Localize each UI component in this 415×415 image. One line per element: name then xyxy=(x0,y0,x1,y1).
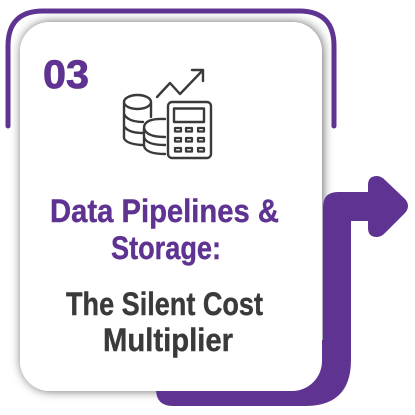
panel: card face xyxy=(20,22,322,391)
outline: purple top bracket xyxy=(8,11,334,126)
heading: purple title: Storage: xyxy=(111,230,221,266)
arrow: purple connector xyxy=(156,176,408,406)
subheading: dark text: The Silent Cost xyxy=(66,286,263,322)
subheading: dark text: Multiplier xyxy=(103,322,233,358)
icon: calculator display xyxy=(174,108,204,122)
step number: 03 xyxy=(43,53,89,97)
subheading: dark text xyxy=(66,286,263,358)
icon: calculator xyxy=(168,102,211,158)
icon: coins, calculator and rising trend xyxy=(124,70,211,158)
heading: purple title: Data Pipelines & xyxy=(50,193,279,229)
heading: purple title xyxy=(50,193,279,266)
card shadow xyxy=(20,22,322,391)
icon: large coin stack xyxy=(124,95,151,145)
icon: small coin stack xyxy=(144,119,165,154)
icon: calculator keys xyxy=(175,128,204,152)
icon: trend arrow xyxy=(157,70,203,97)
